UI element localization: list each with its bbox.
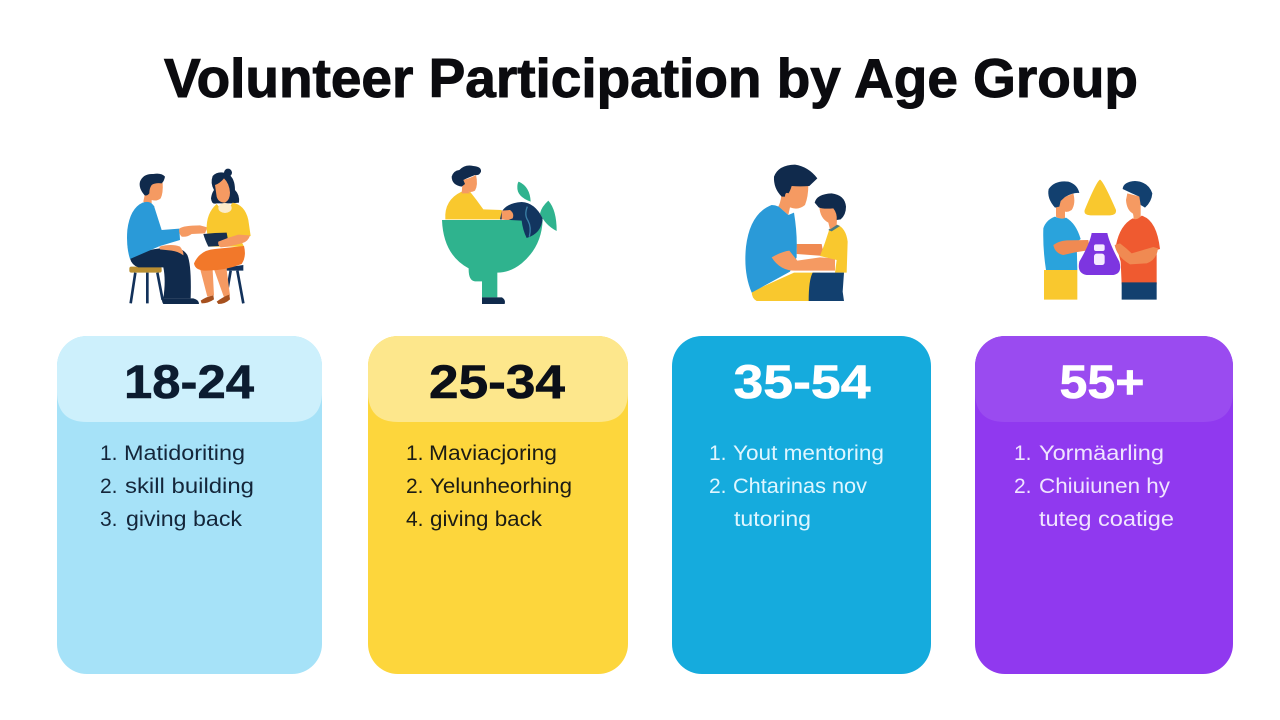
list: 35-54 reasons: 2.	[709, 475, 727, 498]
icon: two people seated shaking hands	[127, 169, 251, 304]
icon: person in green bowl holding globe	[442, 165, 557, 304]
list: 35-54 reasons: Yout mentoring	[733, 442, 884, 465]
list: 35-54 reasons	[709, 442, 884, 531]
list: 25-34 reasons	[406, 442, 572, 531]
panel: 55+	[975, 336, 1233, 674]
list: 35-54 reasons: tutoring	[734, 508, 811, 531]
list: 18-24 reasons: 1.	[100, 442, 118, 465]
list: 55+ reasons: Chiuiunen hy	[1039, 475, 1171, 498]
list: 55+ reasons	[1014, 442, 1174, 531]
panel header: 55+	[975, 336, 1233, 422]
list: 25-34 reasons: Maviacjoring	[429, 442, 557, 465]
panel header: 18-24	[57, 336, 322, 422]
title: Volunteer Participation by Age Group	[164, 47, 1138, 109]
list: 25-34 reasons: 2.	[406, 475, 424, 498]
panel: 35-54	[672, 336, 931, 674]
panel: 25-34	[368, 336, 628, 674]
list: 55+ reasons: tuteg coatige	[1039, 508, 1174, 531]
list: 18-24 reasons: skill building	[125, 475, 254, 498]
icon: two people with triangle and purple shape	[1043, 180, 1160, 300]
list: 18-24 reasons: 2.	[100, 475, 118, 498]
list: 55+ reasons: 1.	[1014, 442, 1032, 465]
age label: 25-34: 25-34	[429, 355, 565, 408]
panel header: 25-34	[368, 336, 628, 422]
age label: 18-24: 18-24	[124, 355, 254, 408]
list: 55+ reasons: Yormäarling	[1039, 442, 1164, 465]
age label: 35-54: 35-54	[734, 355, 870, 408]
list: 18-24 reasons: 3.	[100, 508, 118, 531]
list: 55+ reasons: 2.	[1014, 475, 1032, 498]
list: 25-34 reasons: giving back	[430, 508, 543, 531]
list: 35-54 reasons: Chtarinas nov	[733, 475, 868, 498]
list: 25-34 reasons: Yelunheorhing	[430, 475, 572, 498]
age label: 55+: 55+	[1060, 355, 1144, 408]
list: 25-34 reasons: 4.	[406, 508, 424, 531]
list: 25-34 reasons: 1.	[406, 442, 424, 465]
panel: 18-24	[57, 336, 322, 674]
list: 18-24 reasons	[100, 442, 254, 531]
list: 18-24 reasons: Matidoriting	[124, 442, 245, 465]
list: 35-54 reasons: 1.	[709, 442, 727, 465]
icon: adult and child mentoring	[745, 165, 848, 301]
list: 18-24 reasons: giving back	[126, 508, 243, 531]
